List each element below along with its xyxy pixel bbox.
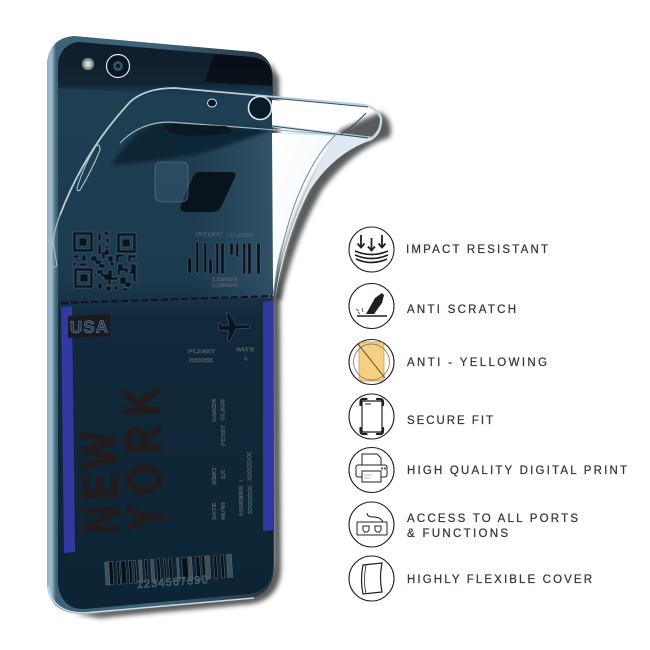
- ticket: YORK: YORK: [112, 376, 174, 532]
- glass reflection top right: [205, 54, 272, 86]
- ticket: rotated details: CABIN: [211, 399, 218, 422]
- feature: highly flexible cover: [349, 556, 592, 601]
- ticket: barcode digits: 1234567890: [136, 574, 208, 591]
- camera: [106, 54, 130, 78]
- case speaker slot: [166, 124, 231, 136]
- case fingerprint window: [155, 162, 188, 202]
- case camera ring: [248, 96, 272, 120]
- feature: anti yellowing: [349, 340, 547, 384]
- side button slot: [77, 145, 100, 191]
- feature: access to all ports: [349, 502, 578, 547]
- label: HIGH QUALITY DIGITAL PRINT: [407, 465, 627, 477]
- icon: secure fit: [349, 394, 394, 439]
- ticket: first class label: FIRST CLASS: [196, 231, 254, 239]
- phone back: [58, 42, 273, 609]
- flap drop shadow: [275, 112, 391, 300]
- ticket: NEW: NEW: [70, 425, 130, 535]
- case edges: [50, 88, 370, 296]
- label: SECURE FIT: [407, 415, 493, 427]
- icon: flexible cover: [349, 556, 394, 601]
- ticket: flight and gate: FLIGHT: [188, 348, 216, 355]
- ticket: blue bar right: [263, 301, 273, 531]
- icon: printer: [349, 448, 394, 492]
- ticket: bottom barcode: [105, 554, 233, 585]
- label: [407, 513, 578, 540]
- phone drop shadow: [75, 62, 281, 618]
- case shade: [112, 122, 272, 165]
- ticket: rotated details: SEAT: [211, 466, 218, 485]
- icon: ports: [349, 502, 394, 547]
- flash: [82, 58, 94, 70]
- ticket: rotated details: 08/08: [220, 501, 227, 520]
- flap outer body: [275, 118, 382, 300]
- ticket: USA tag: USA: [70, 317, 108, 337]
- ticket: flight and gate: 1: [244, 355, 248, 362]
- ticket: first class barcode: [188, 242, 260, 274]
- label: & FUNCTIONS: [407, 528, 508, 540]
- ticket: perforation: [61, 296, 272, 303]
- feature: high quality digital print: [349, 448, 627, 492]
- feature: secure fit: [349, 394, 493, 439]
- ticket: flight and gate: [188, 346, 255, 364]
- icon: impact: [349, 227, 394, 272]
- ticket: QR code: [73, 232, 136, 291]
- feature: impact resistant: [349, 227, 548, 272]
- label: ANTI SCRATCH: [407, 304, 516, 316]
- ticket: rotated details: PASSENGER :: [237, 479, 245, 516]
- case flash hole: [208, 99, 216, 107]
- right glow: [222, 130, 272, 298]
- ticket: blue bar left: [61, 306, 75, 553]
- volume side slot: [49, 240, 57, 268]
- ticket: barcode number: 123456: [212, 276, 238, 283]
- ticket: flight and gate: GATE: [236, 346, 255, 353]
- label: ANTI - YELLOWING: [407, 357, 547, 369]
- flap upper opening: [272, 100, 368, 127]
- flap outer tip: [272, 97, 381, 138]
- icon: yellowing: [349, 340, 394, 384]
- ticket: rotated details: XXXXXX XXXXXX: [246, 451, 254, 514]
- ticket: rotated details: FIRST CLASS: [219, 398, 227, 446]
- label: IMPACT RESISTANT: [406, 244, 548, 256]
- label: HIGHLY FLEXIBLE COVER: [407, 574, 592, 586]
- phone rim: [47, 36, 274, 614]
- flap curved tint: [272, 132, 340, 290]
- label: ACCESS TO ALL PORTS: [407, 513, 578, 525]
- ticket: barcode number: [212, 276, 238, 289]
- ticket: plane icon: [218, 313, 250, 341]
- ticket: flight and gate: XXXXX: [189, 357, 214, 364]
- ticket: barcode number: 123456: [212, 282, 238, 289]
- case white flap: [272, 133, 337, 296]
- rim highlight: [48, 586, 254, 613]
- phone with transparent case: [47, 36, 391, 618]
- icon: scratch: [349, 284, 394, 328]
- dark camera band: [58, 42, 272, 92]
- fingerprint sensor: [180, 172, 236, 212]
- ticket: rotated details: DATE: [211, 502, 218, 520]
- ticket: rotated details: 1X: [220, 469, 227, 479]
- ticket: rotated details: [211, 398, 254, 520]
- feature: anti scratch: [349, 284, 516, 328]
